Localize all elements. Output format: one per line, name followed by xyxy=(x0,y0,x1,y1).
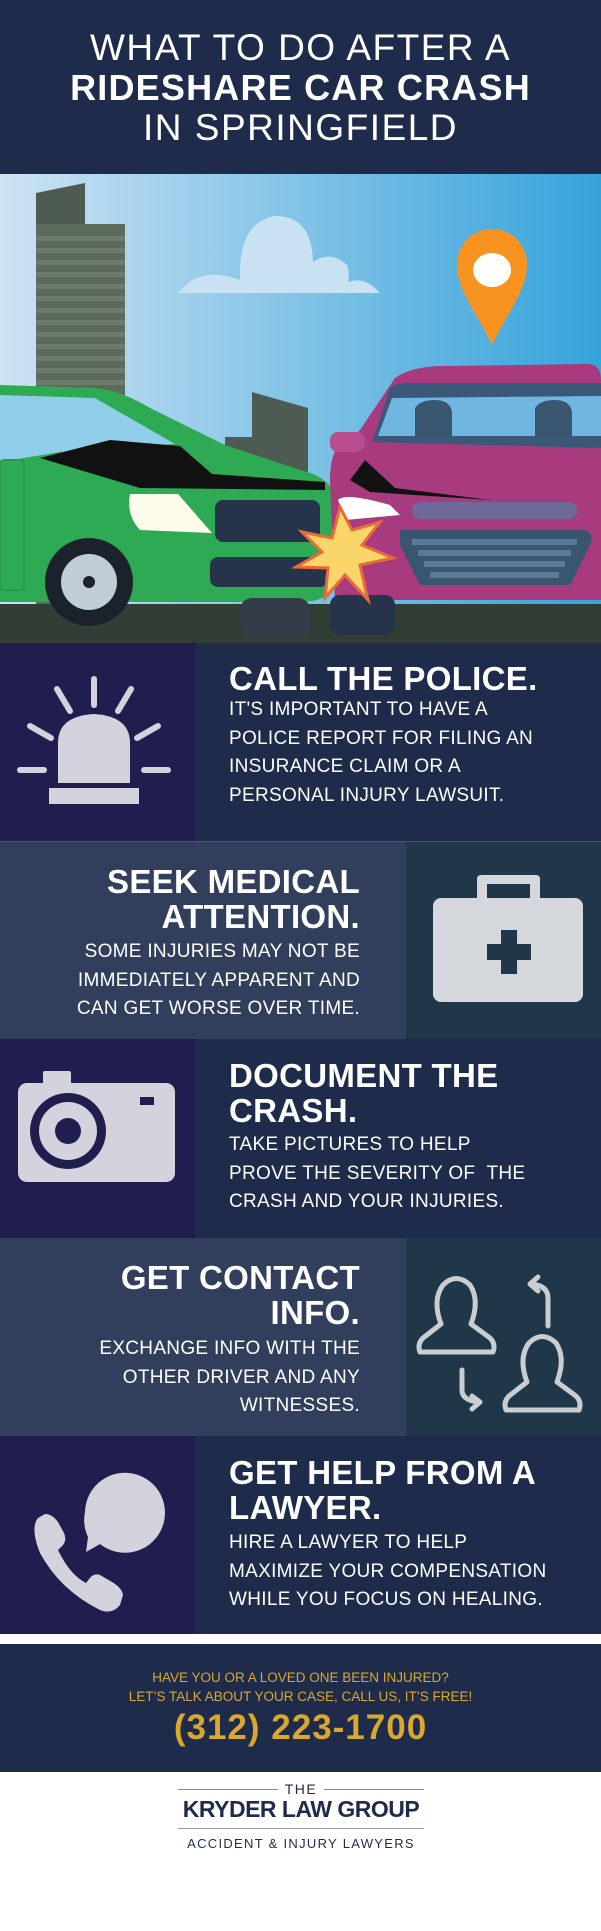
title: IN SPRINGFIELD xyxy=(143,107,458,148)
illustration: car crash scene xyxy=(0,174,601,643)
body text: SOME INJURIES MAY NOT BE xyxy=(85,941,360,962)
logo: THE xyxy=(285,1781,317,1797)
body text xyxy=(229,1532,546,1610)
panel: seek medical attention xyxy=(0,841,601,1039)
panel: get contact info xyxy=(0,1238,601,1436)
cloud xyxy=(178,216,380,293)
body text xyxy=(77,941,360,1019)
ground xyxy=(0,604,601,643)
logo: ACCIDENT & INJURY LAWYERS xyxy=(187,1836,415,1851)
body text: PERSONAL INJURY LAWSUIT. xyxy=(229,784,504,806)
heading xyxy=(107,863,360,935)
panel: document the crash xyxy=(0,1039,601,1238)
heading xyxy=(121,1259,360,1331)
body text: IMMEDIATELY APPARENT AND xyxy=(78,970,360,990)
title: WHAT TO DO AFTER A xyxy=(90,27,511,68)
body text: WHILE YOU FOCUS ON HEALING. xyxy=(229,1589,543,1610)
heading: DOCUMENT THE xyxy=(229,1057,498,1094)
body text: POLICE REPORT FOR FILING AN xyxy=(229,728,533,748)
body text xyxy=(229,1134,525,1212)
heading: CALL THE POLICE. xyxy=(229,660,538,697)
magenta car xyxy=(330,364,601,635)
heading: SEEK MEDICAL xyxy=(107,863,360,900)
body text xyxy=(99,1338,360,1416)
phone number: (312) 223-1700 xyxy=(174,1708,427,1747)
body text: CRASH AND YOUR INJURIES. xyxy=(229,1191,504,1212)
heading: GET HELP FROM A xyxy=(229,1454,536,1491)
panel: get help from a lawyer xyxy=(0,1436,601,1634)
body text: HIRE A LAWYER TO HELP xyxy=(229,1532,467,1553)
callout: call to action xyxy=(0,1644,601,1772)
title: RIDESHARE CAR CRASH xyxy=(70,67,531,108)
short building xyxy=(252,392,308,600)
header band xyxy=(0,0,601,174)
body text: OTHER DRIVER AND ANY xyxy=(123,1366,360,1388)
map pin xyxy=(457,229,527,345)
crash starburst xyxy=(296,507,393,600)
heading: LAWYER. xyxy=(229,1489,381,1526)
icon: exchange contacts xyxy=(406,1238,601,1436)
heading: GET CONTACT xyxy=(121,1259,360,1296)
body text: WITNESSES. xyxy=(240,1395,360,1416)
callout: call to action: LET’S TALK ABOUT YOUR CASE, CALL US, IT’S FREE! xyxy=(129,1689,472,1704)
icon: siren xyxy=(0,643,195,841)
heading xyxy=(229,1454,536,1526)
heading xyxy=(229,1057,498,1129)
logo: KRYDER LAW GROUP xyxy=(183,1796,419,1822)
icon: phone and chat bubble xyxy=(0,1436,195,1634)
tall building xyxy=(36,183,125,614)
icon: first aid kit xyxy=(406,842,601,1040)
body text: IT'S IMPORTANT TO HAVE A xyxy=(229,699,488,720)
body text: MAXIMIZE YOUR COMPENSATION xyxy=(229,1560,546,1582)
body text: CAN GET WORSE OVER TIME. xyxy=(77,998,360,1019)
heading: ATTENTION. xyxy=(161,898,360,935)
green car xyxy=(0,385,335,638)
body text: TAKE PICTURES TO HELP xyxy=(229,1134,471,1155)
body text: EXCHANGE INFO WITH THE xyxy=(99,1338,360,1359)
body text: INSURANCE CLAIM OR A xyxy=(229,756,461,777)
title xyxy=(70,27,531,148)
heading: INFO. xyxy=(270,1294,360,1331)
icon: camera xyxy=(0,1039,195,1238)
body text xyxy=(229,699,533,806)
heading: CRASH. xyxy=(229,1092,357,1129)
logo xyxy=(178,1781,424,1851)
body text: PROVE THE SEVERITY OF THE xyxy=(229,1162,525,1184)
panel: call the police xyxy=(0,643,601,841)
callout: call to action: HAVE YOU OR A LOVED ONE BEEN INJURED? xyxy=(152,1670,449,1685)
